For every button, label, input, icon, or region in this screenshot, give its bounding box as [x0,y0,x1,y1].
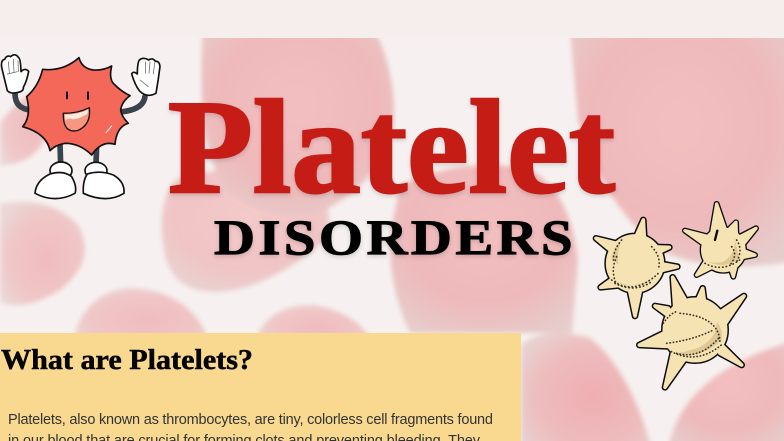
platelet: bottom [639,277,744,387]
subtitle: Disorders: DISORDERS [214,209,576,265]
body [23,58,130,155]
platelet: top right [685,204,756,277]
left glove [1,55,29,93]
top strip [0,0,784,38]
right glove [132,58,160,95]
mouth [63,108,90,131]
mascot: smiling platelet [1,55,160,199]
title: Platelet: Platelet [168,73,615,221]
panel background [0,333,521,441]
eyes [67,92,88,99]
left shoe [35,162,76,199]
panel body text [8,412,493,441]
right shoe [83,162,124,199]
platelet: top left [596,220,677,316]
panel body text: Platelets, also known as thrombocytes, are tiny, colorless cell fragments found [8,412,493,428]
panel heading: What are Platelets? [1,344,253,376]
panel: what are platelets [0,333,521,441]
arms and legs [15,93,145,165]
platelet illustrations [596,204,756,387]
glove lines [7,59,155,87]
